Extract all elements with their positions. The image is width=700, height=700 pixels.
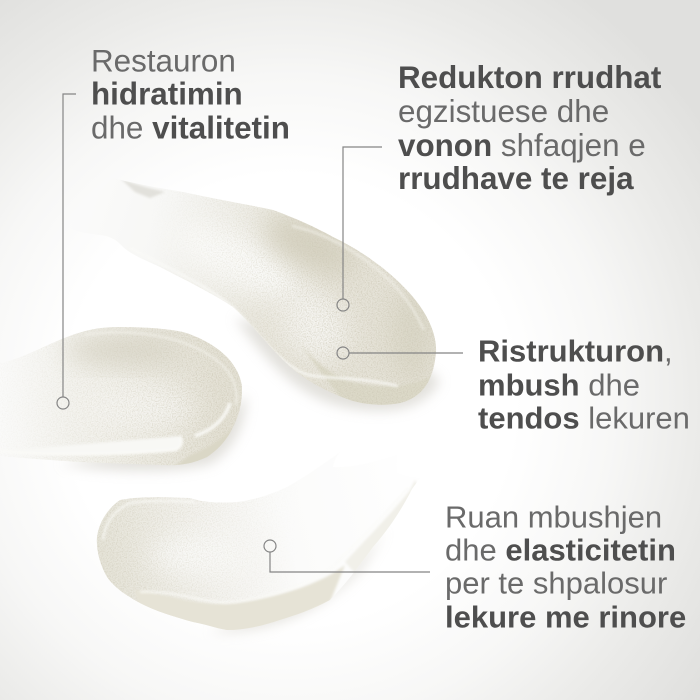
text block: restructure: Ristrukturon, xyxy=(478,334,673,368)
text block: wrinkles: Redukton rrudhat xyxy=(398,60,662,95)
leader line and marker: wrinkles xyxy=(337,147,382,311)
text block: wrinkles: vonon shfaqjen e xyxy=(398,128,646,163)
text block: elasticity: lekure me rinore xyxy=(445,600,686,634)
text block: restructure: tendos lekuren xyxy=(478,400,690,436)
text block: wrinkles: rrudhave te reja xyxy=(398,161,634,196)
text block: restructure xyxy=(478,334,690,436)
leader line and marker: restructure xyxy=(337,347,463,359)
cream swatch: top xyxy=(122,180,441,415)
text block: restructure: mbush dhe xyxy=(478,368,640,402)
text block: wrinkles: egzistuese dhe xyxy=(398,94,609,129)
leader line and marker: hydration xyxy=(57,94,76,409)
cream swatch: left xyxy=(0,320,250,471)
text block: hydration xyxy=(91,44,290,146)
cream swatch: bottom xyxy=(96,481,416,635)
text block: wrinkles xyxy=(398,60,662,196)
text block: hydration: hidratimin xyxy=(91,76,243,112)
text block: elasticity: dhe elasticitetin xyxy=(445,532,676,568)
text block: hydration: dhe vitalitetin xyxy=(91,110,290,146)
text block: elasticity: Ruan mbushjen xyxy=(445,500,662,534)
leader line and marker: elasticity xyxy=(264,540,430,572)
text block: elasticity xyxy=(445,500,686,634)
text block: elasticity: per te shpalosur xyxy=(445,566,667,600)
text block: hydration: Restauron xyxy=(91,44,236,78)
